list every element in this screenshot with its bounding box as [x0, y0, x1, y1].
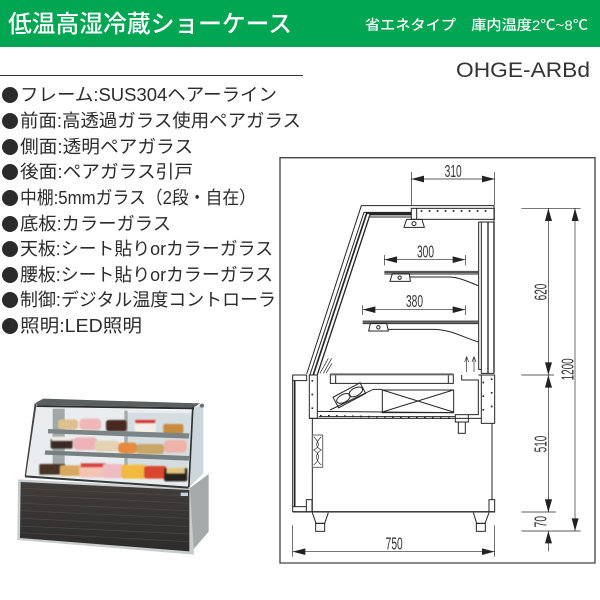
side section drawing [280, 158, 595, 563]
drawing frame [280, 158, 595, 563]
bottom food [39, 463, 187, 481]
side of the base [190, 474, 209, 553]
rear of top box [411, 208, 494, 219]
feet [312, 513, 328, 523]
spec: bottom plate: 底板:カラーガラス [20, 214, 171, 234]
spec: mid shelf: 中棚:5mmガラス（2段・自在） [20, 188, 256, 208]
subtitle: energy saving and temperature: 省エネタイプ 庫内温度2℃~8℃ [365, 17, 588, 33]
evaporator [382, 390, 454, 413]
base frame [17, 479, 194, 555]
dimension 750 [293, 525, 495, 557]
top tray [330, 374, 453, 383]
upper shelf [384, 272, 478, 286]
roof [36, 399, 200, 407]
dimension 1200: 1200 [557, 358, 577, 380]
spec: rear: 後面:ペアガラス引戸 [20, 162, 193, 182]
dimension 380: 380 [406, 291, 423, 311]
dimension 750: 750 [386, 533, 403, 553]
badge [181, 493, 188, 496]
drain [455, 415, 468, 422]
dimension 70 [521, 497, 581, 551]
body: outer cabinet and refrigeration unit [293, 374, 495, 531]
dimension 620: 620 [531, 284, 551, 300]
spec: side: 側面:透明ペアガラス [20, 137, 193, 157]
lower shelf [363, 322, 478, 342]
title: 低温高湿冷蔵ショーケース [8, 11, 292, 38]
dimension 620 [521, 208, 581, 375]
dimension 300: 300 [417, 241, 434, 261]
middle shelf food [51, 437, 187, 454]
spec list [2, 85, 301, 336]
rule above spec list [0, 75, 303, 76]
lower shelf [45, 450, 189, 461]
top shelf food [58, 419, 183, 434]
glass front frame [25, 403, 37, 476]
airflow arrows, front and rear [320, 357, 476, 373]
spec: control: 制御:デジタル温度コントローラ [20, 290, 276, 310]
product photo: showcase [17, 399, 209, 555]
dimension 510 [531, 375, 552, 512]
base dark wood panel [20, 482, 189, 551]
glass canopy [307, 206, 494, 375]
dimension 380 [363, 291, 465, 315]
side glass [190, 403, 203, 487]
header band [0, 0, 600, 47]
dimension 310: 310 [445, 161, 462, 181]
caster blocks [306, 500, 312, 512]
model name: OHGE-ARBd [456, 59, 590, 82]
spec: waist plate: 腰板:シート貼りorカラーガラス [20, 265, 273, 285]
insulation dots [312, 378, 492, 417]
dimension 300 [384, 241, 465, 265]
fan [333, 383, 366, 408]
dimension 1200 [557, 208, 579, 531]
top light [404, 219, 424, 227]
dimension 510: 510 [531, 436, 551, 452]
spec: front: 前面:高透過ガラス使用ペアガラス [20, 111, 301, 131]
spec: frame: フレーム:SUS304ヘアーライン [20, 85, 277, 105]
interior back [25, 407, 193, 487]
upper shelf [48, 429, 189, 439]
spec: lighting: 照明:LED照明 [20, 316, 142, 336]
condenser fan [312, 435, 323, 467]
dimension 70: 70 [531, 516, 551, 527]
spec: top plate: 天板:シート貼りorカラーガラス [20, 239, 273, 259]
right duct [462, 375, 478, 415]
dimension 310 [411, 161, 495, 205]
machine compartment [312, 418, 494, 512]
rear doors [479, 222, 494, 373]
